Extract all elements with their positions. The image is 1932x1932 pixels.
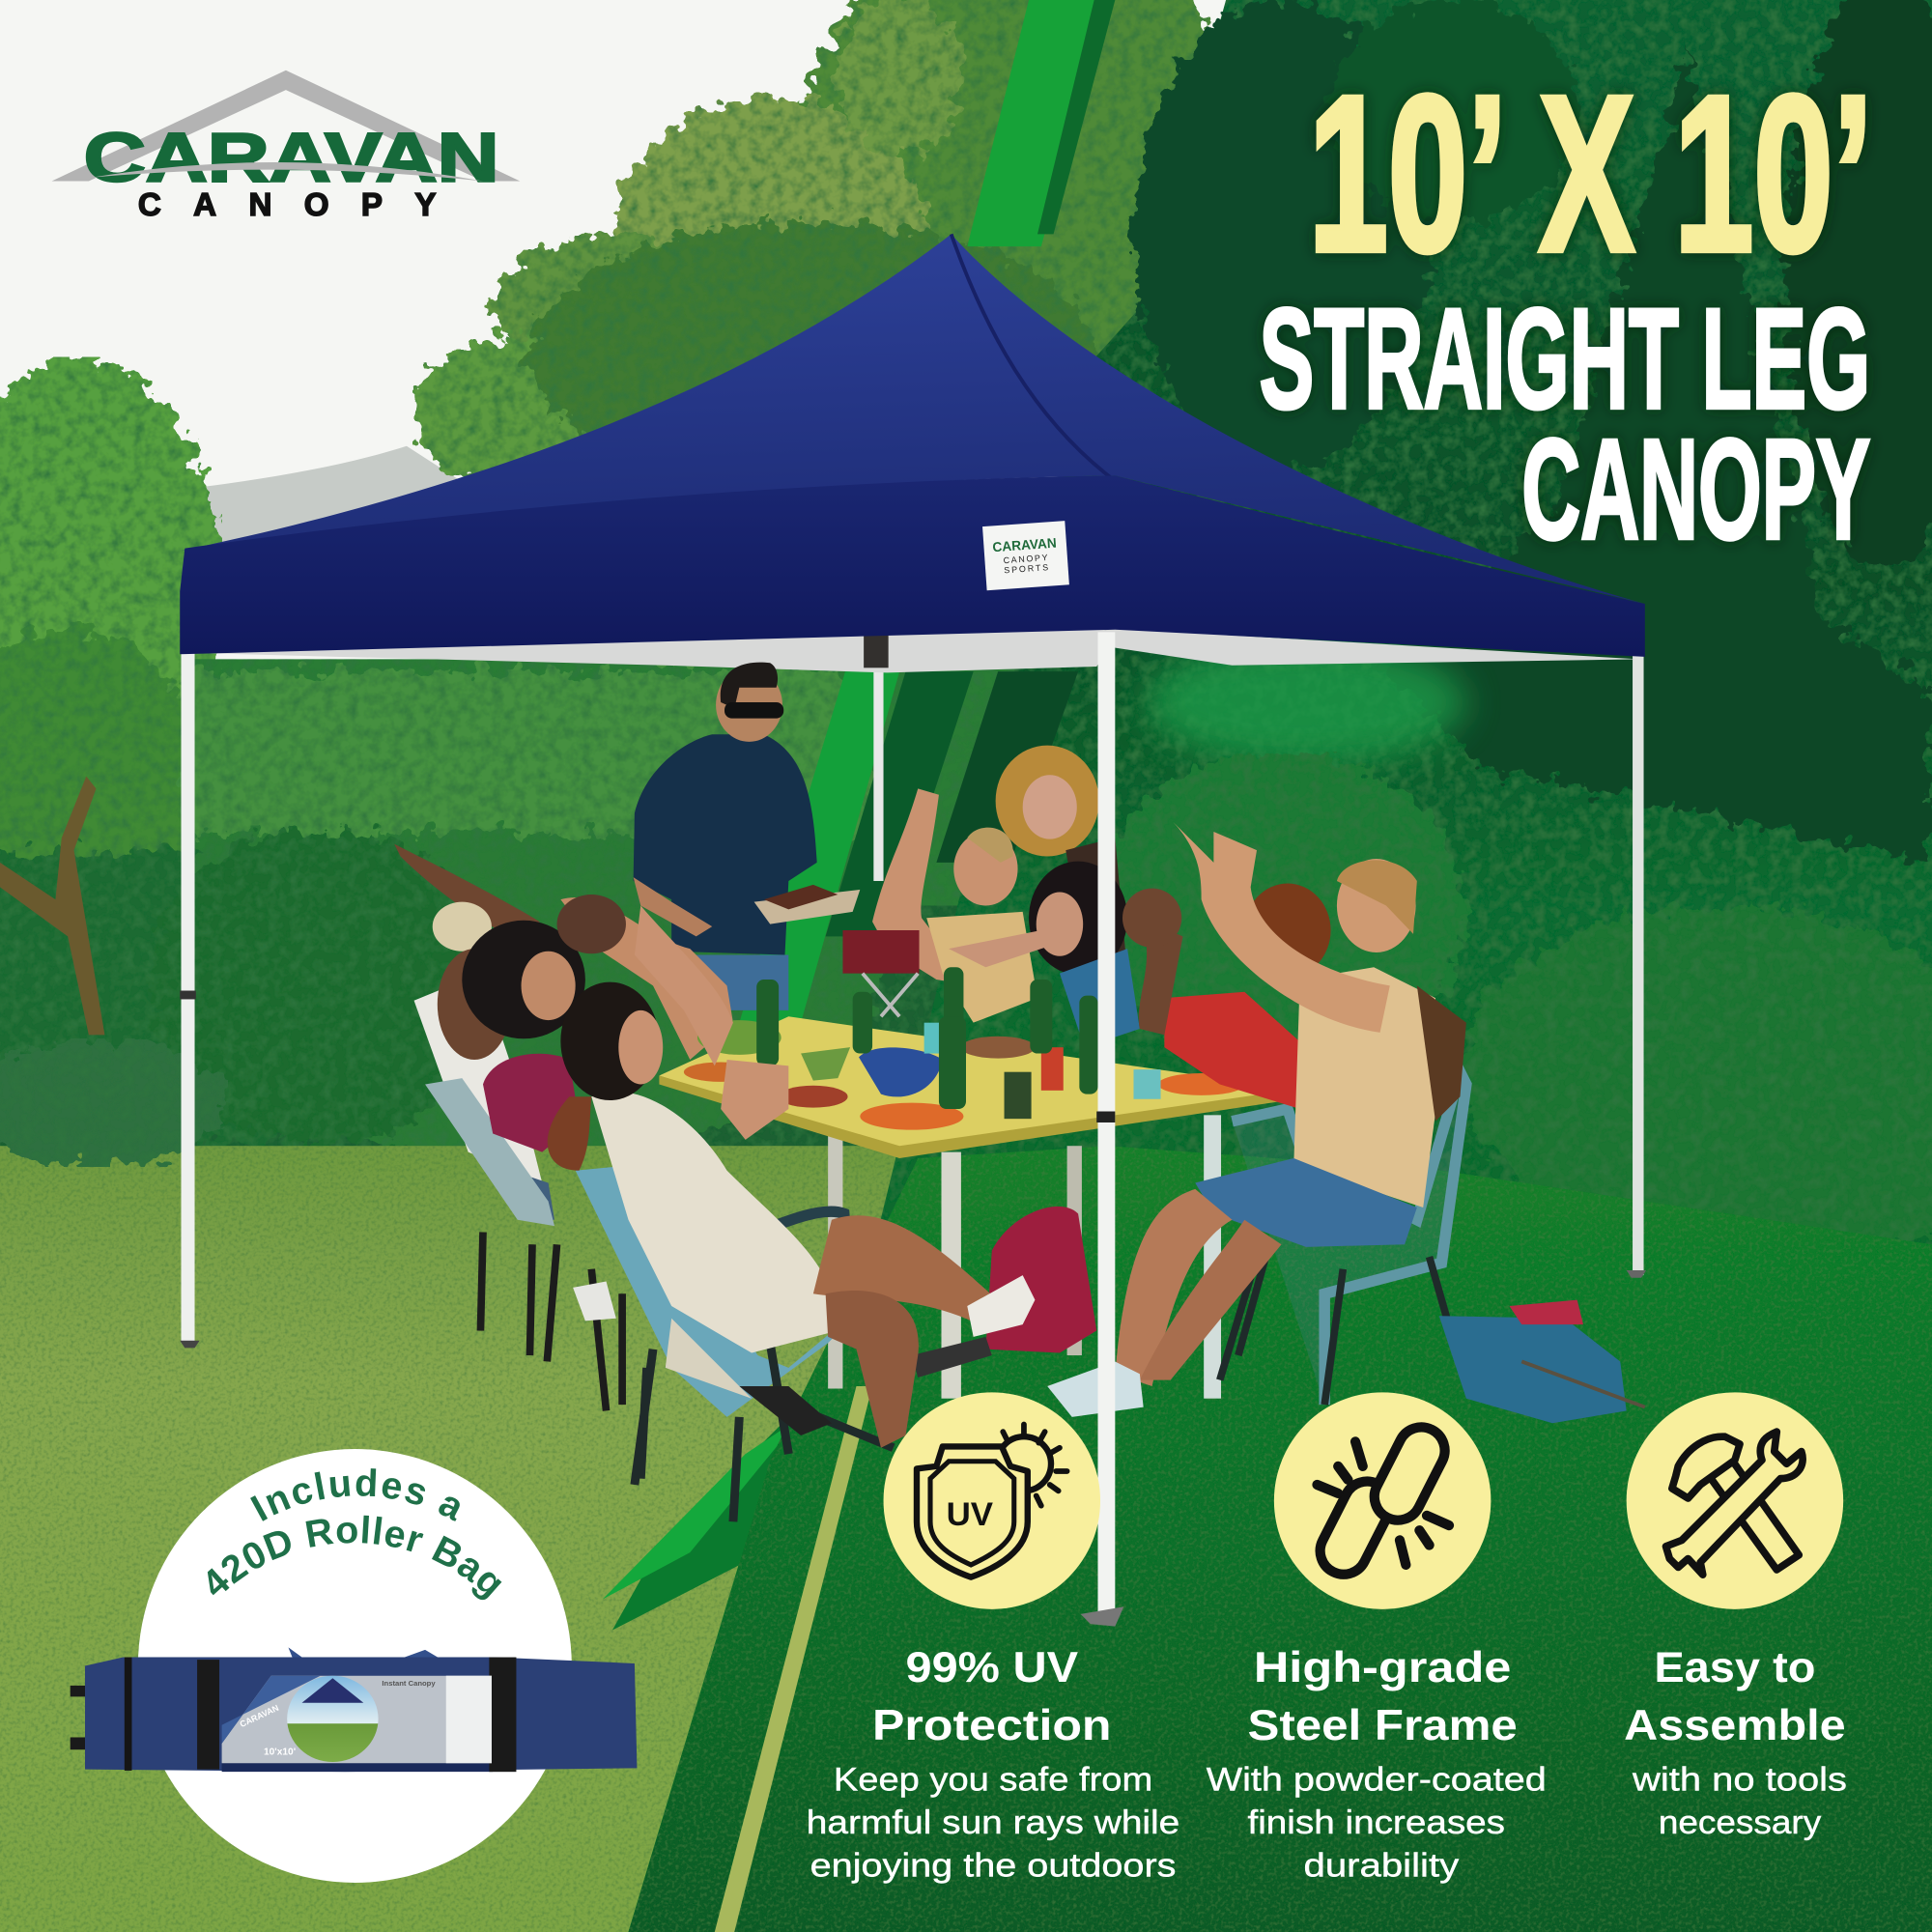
center man with tan shirt [872, 788, 1037, 1023]
icon: UV shield and sun: UV [947, 1496, 993, 1533]
person in white tank [394, 844, 542, 1182]
tent pole right [1627, 653, 1646, 1278]
grey woven chair [425, 1078, 554, 1226]
body text: steel frame [1207, 1761, 1547, 1885]
green stripes under canopy [739, 671, 1078, 1023]
serving tray [754, 890, 860, 924]
feature: UV protection [807, 1392, 1179, 1885]
body text: steel frame: With powder-coated [1207, 1761, 1547, 1798]
logo subtitle CANOPY: CANOPY [138, 187, 437, 223]
underside of canopy [197, 629, 1638, 672]
denim shorts left [511, 1171, 554, 1220]
woman with blonde hair [996, 746, 1127, 974]
blue chair [576, 1164, 894, 1521]
man standing [634, 663, 860, 1010]
people around the table [394, 663, 1645, 1521]
body text: UV protection: enjoying the outdoors [810, 1848, 1176, 1885]
low bush left [0, 1038, 228, 1167]
upper bright green stripe [967, 0, 1109, 246]
roller bag badge [70, 1449, 638, 1883]
icon: hammer and wrench [1627, 1392, 1843, 1609]
canopy label tag [982, 521, 1069, 590]
body text: assemble: necessary [1659, 1804, 1822, 1841]
left tree foliage [0, 357, 222, 949]
white badge circle [138, 1449, 572, 1883]
sky background [0, 0, 1932, 1233]
crossed legs [813, 1215, 1005, 1328]
body text: UV protection: Keep you safe from [834, 1761, 1152, 1798]
laughing woman with dark hair [949, 862, 1140, 1047]
badge curved text line 2: 420D Roller Bag [207, 1515, 502, 1600]
background hedges [0, 659, 1122, 1164]
woman in white cardigan [548, 906, 1035, 1448]
tree trunk [0, 777, 104, 1035]
heading: Easy to Assemble [1624, 1644, 1846, 1749]
heading: 99% UV Protection: 99% UV [906, 1644, 1078, 1691]
right chair [1220, 1072, 1466, 1405]
dark chair legs left [480, 1233, 622, 1410]
bushes on the right [1096, 752, 1932, 1257]
heading: Easy to Assemble: Assemble [1624, 1702, 1846, 1749]
woman in red shirt [1122, 884, 1331, 1109]
distant misty hill [203, 446, 518, 542]
tent pole left [180, 653, 200, 1348]
man in beige t-shirt [1047, 819, 1466, 1417]
backpack [985, 1207, 1096, 1353]
lower green accent stripes [603, 1417, 868, 1932]
shoes under chairs [573, 1282, 992, 1435]
upper tree foliage [412, 0, 1244, 493]
badge curved text line 1: Includes a [250, 1468, 460, 1521]
canopy tent [180, 234, 1646, 1348]
clothes pile [1439, 1300, 1645, 1423]
frame hub [864, 634, 889, 668]
person in maroon shirt [462, 895, 733, 1152]
right green ground [629, 1146, 1932, 1932]
canopy label tag: CARAVAN [992, 535, 1057, 554]
roller bag [71, 1647, 637, 1772]
table [659, 1016, 1296, 1399]
ridge line [952, 234, 1112, 478]
roof top [182, 234, 1645, 604]
light green clearing [1146, 640, 1466, 764]
front tent pole [1081, 632, 1123, 1627]
body text: UV protection [807, 1761, 1179, 1885]
logo swoosh [93, 162, 483, 182]
body text: assemble: with no tools [1632, 1761, 1847, 1798]
logo: Caravan Canopy [52, 71, 520, 223]
feature: easy to assemble [1624, 1392, 1847, 1841]
body text: assemble [1632, 1761, 1847, 1841]
right forest panel [863, 0, 1932, 1293]
green bottles [756, 967, 1097, 1109]
canopy label tag: SPORTS [1004, 562, 1049, 575]
heading: 99% UV Protection [872, 1644, 1112, 1749]
small red grill [842, 930, 920, 1016]
body text: steel frame: durability [1303, 1848, 1460, 1885]
upper dark green stripe [1037, 0, 1115, 234]
bag label: CARAVAN [239, 1703, 280, 1729]
heading: High-grade Steel Frame [1247, 1644, 1518, 1749]
lawn [0, 1146, 985, 1932]
feature: steel frame [1207, 1392, 1547, 1885]
icon: chain link [1274, 1392, 1491, 1609]
heading: 99% UV Protection: Protection [872, 1702, 1112, 1749]
canopy label tag: CANOPY [1003, 553, 1048, 565]
tan accent stripe [715, 1386, 872, 1932]
dark pine trees [1133, 0, 1932, 863]
body text: UV protection: harmful sun rays while [807, 1804, 1179, 1841]
bag label [222, 1676, 492, 1763]
valance [180, 475, 1645, 657]
food on the table [684, 1020, 1244, 1130]
heading: High-grade Steel Frame: High-grade [1254, 1644, 1511, 1691]
bag label: 10'x10' [264, 1747, 296, 1757]
heading: Easy to Assemble: Easy to [1654, 1644, 1815, 1691]
heading: High-grade Steel Frame: Steel Frame [1247, 1702, 1518, 1749]
logo roof [52, 71, 520, 182]
body text: steel frame: finish increases [1247, 1804, 1505, 1841]
bag label: Instant Canopy [382, 1679, 436, 1688]
logo wordmark CARAVAN: CARAVAN [84, 119, 499, 196]
icon: UV shield and sun [884, 1392, 1100, 1609]
tent pole back [873, 666, 884, 881]
